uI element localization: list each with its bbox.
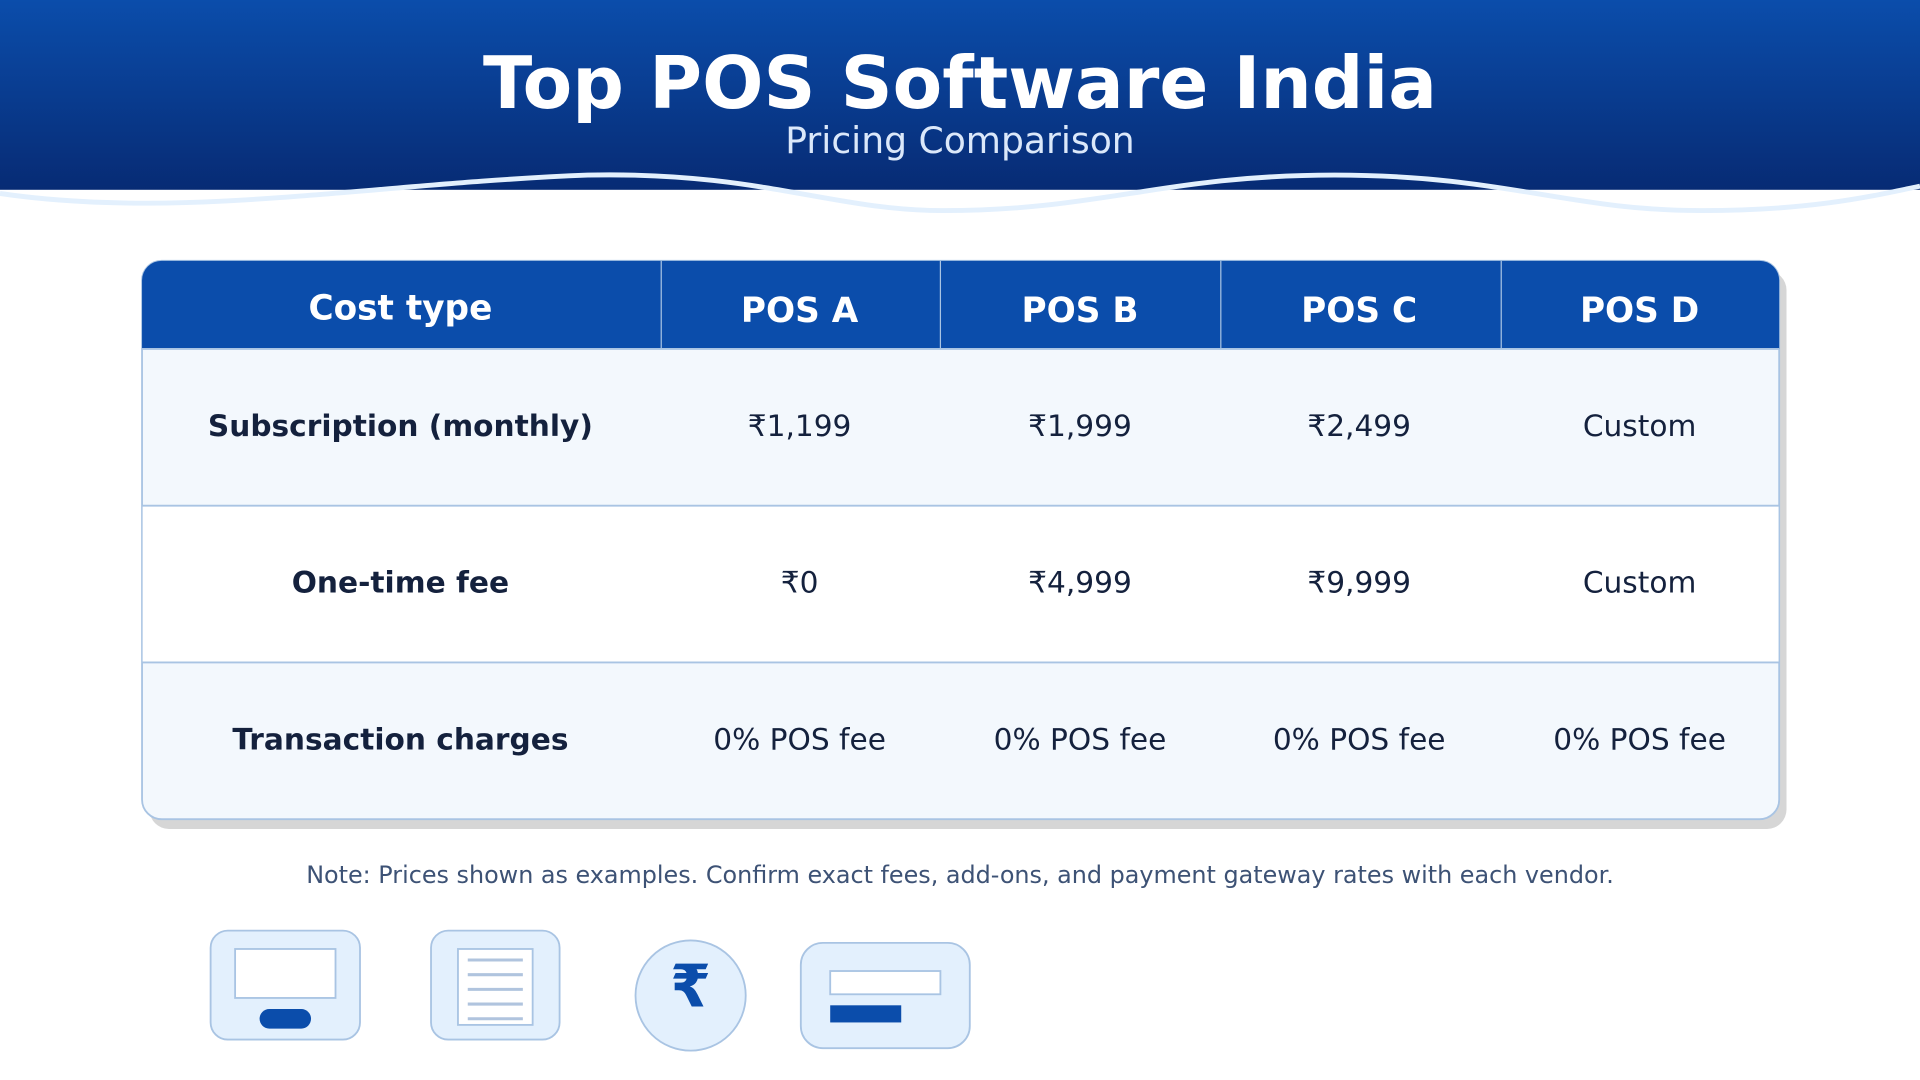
note: Note: Prices shown as examples. Confirm exact fees, add-ons, and payment gateway rates with each vendor.: [306, 861, 1614, 889]
row: transaction charges: [232, 721, 1726, 756]
table header row: POS B: [1022, 291, 1138, 331]
pricing table: [142, 261, 1787, 829]
row: subscription: ₹1,999: [1028, 408, 1132, 443]
row: transaction charges: Transaction charges: [232, 721, 568, 756]
table header row: POS D: [1580, 291, 1699, 331]
row: transaction charges: 0% POS fee: [1553, 721, 1726, 756]
table header row: Cost type: [308, 289, 492, 329]
row: subscription: ₹1,199: [748, 408, 851, 443]
row: one-time fee: [292, 565, 1696, 600]
row: subscription: [208, 408, 1696, 443]
icon: card / payment: [801, 943, 970, 1048]
table header row: POS C: [1301, 291, 1417, 331]
row: subscription: Custom: [1583, 408, 1696, 443]
icon: POS terminal: [211, 931, 360, 1040]
row: one-time fee: ₹0: [781, 565, 818, 600]
row: subscription: ₹2,499: [1307, 408, 1411, 443]
row: one-time fee: One-time fee: [292, 565, 509, 600]
row: transaction charges: 0% POS fee: [994, 721, 1166, 756]
icon: rupee coin: [636, 940, 746, 1051]
icon: receipt: [431, 931, 560, 1040]
table header row: POS A: [741, 291, 859, 331]
title: Top POS Software India: [483, 42, 1437, 126]
row: one-time fee: ₹9,999: [1307, 565, 1411, 600]
subtitle: Pricing Comparison: [785, 119, 1135, 162]
row: subscription: Subscription (monthly): [208, 408, 593, 443]
row: one-time fee: Custom: [1583, 565, 1696, 600]
table header row: [308, 289, 1699, 331]
icon: rupee coin: ₹: [670, 952, 711, 1021]
row: transaction charges: 0% POS fee: [1273, 721, 1446, 756]
row: one-time fee: ₹4,999: [1028, 565, 1132, 600]
header band: [0, 0, 1920, 211]
row: transaction charges: 0% POS fee: [713, 721, 886, 756]
